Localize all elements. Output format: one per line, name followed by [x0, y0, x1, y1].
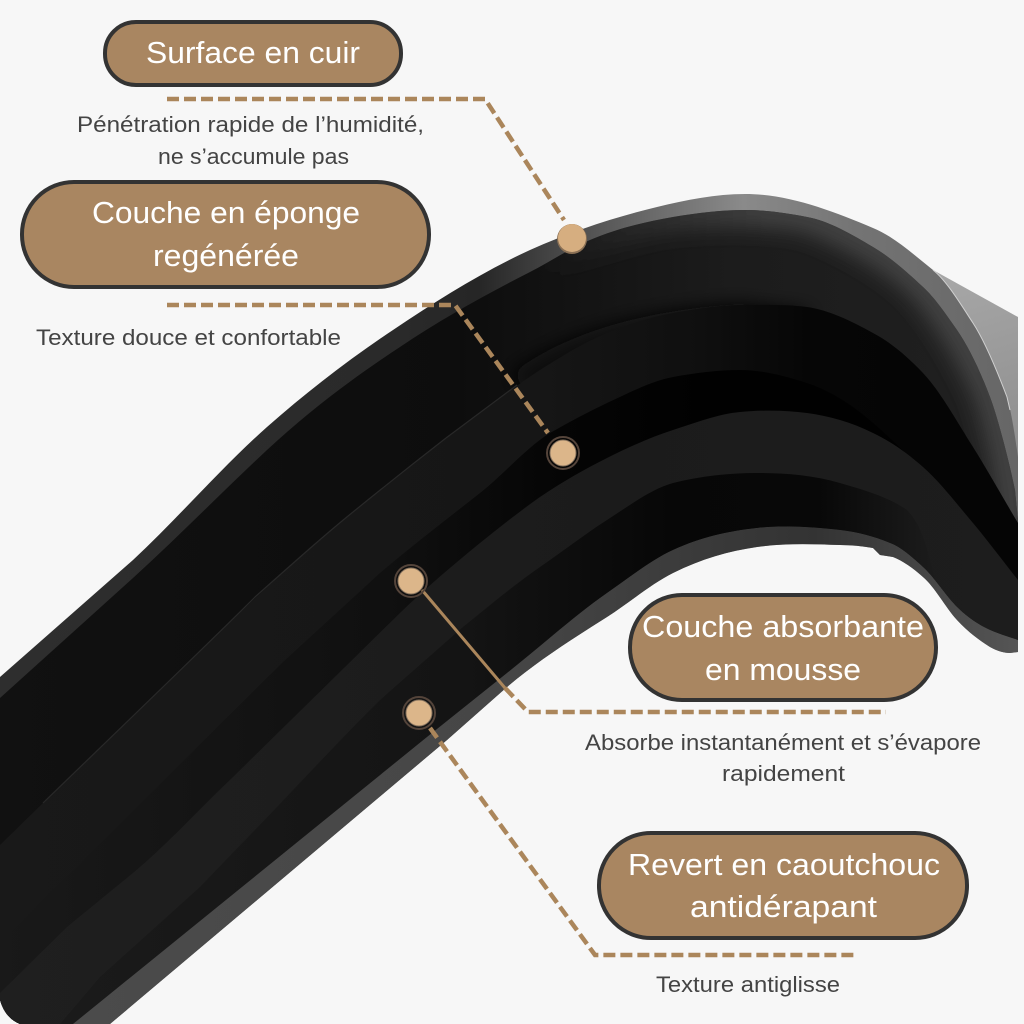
foam layer [0, 411, 1024, 1024]
label: Couche en éponge regénérée: Couche en éponge [92, 195, 360, 230]
label: Couche absorbante en mousse: Couche absorbante [642, 609, 924, 644]
label: Revert en caoutchouc antidérapant: antidérapant [690, 889, 877, 924]
label: Surface en cuir [105, 22, 401, 85]
label: Surface en cuir: Surface en cuir [146, 35, 360, 70]
marker: surface [557, 224, 587, 254]
grey wing of the insole [920, 270, 1018, 520]
leader line: couche absorbante [422, 590, 886, 712]
label: Couche absorbante en mousse: en mousse [705, 652, 861, 687]
description: surface [77, 112, 424, 169]
shadow under leather layer [538, 300, 792, 356]
highlight line along the rim [933, 270, 1010, 410]
label: Revert en caoutchouc antidérapant [599, 833, 967, 938]
label: Couche en éponge regénérée [22, 182, 429, 287]
bottom rim [73, 527, 1018, 1024]
marker: foam [395, 565, 427, 597]
faint seam line [43, 385, 517, 803]
sponge layer [0, 305, 1024, 1024]
label: Couche en éponge regénérée: regénérée [153, 238, 299, 273]
marker: rubber [403, 697, 435, 729]
description: surface: ne s’accumule pas [158, 144, 349, 169]
description: surface: Pénétration rapide de l’humidité, [77, 112, 424, 137]
description: foam [585, 730, 981, 786]
description: rubber: Texture antiglisse [656, 972, 840, 997]
leader line: revert en caoutchouc [430, 728, 858, 955]
description: foam: Absorbe instantanément et s’évapore [585, 730, 981, 755]
dark shadow band [0, 370, 774, 1024]
label: Revert en caoutchouc antidérapant: Revert en caoutchouc [628, 847, 940, 882]
description: foam: rapidement [722, 761, 845, 786]
leader line: surface en cuir [167, 99, 564, 220]
leader line: couche en éponge [167, 305, 548, 433]
label: Couche absorbante en mousse [630, 595, 936, 700]
description: sponge: Texture douce et confortable [36, 325, 341, 350]
marker: sponge [547, 437, 579, 469]
rubber layer [466, 473, 890, 704]
